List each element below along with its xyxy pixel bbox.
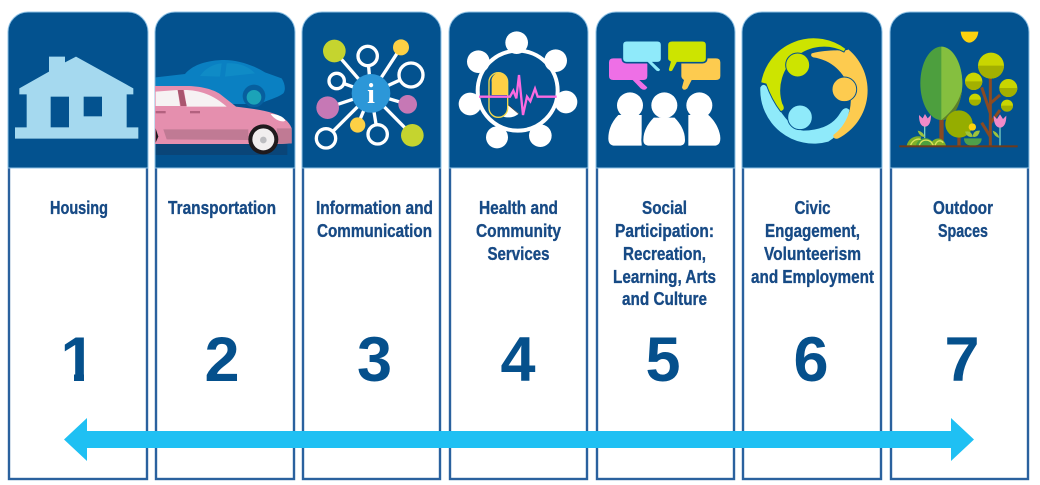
number 3: 3 — [357, 325, 392, 395]
number 4: 4 — [500, 325, 536, 395]
heading: outdoor spaces: Outdoor — [933, 197, 993, 218]
number 6: 6 — [793, 325, 829, 395]
heading: civic engagement: Volunteerism — [764, 243, 861, 264]
icon: trees and flowers — [899, 32, 1018, 147]
heading: civic engagement: Civic — [794, 197, 830, 218]
panel: housing — [8, 12, 148, 479]
heading: information and communication: Information and — [316, 197, 433, 218]
heading: health and community services: Health and — [479, 197, 558, 218]
icon: cars — [147, 60, 292, 155]
heading: social participation: Recreation, — [623, 243, 706, 264]
icon: health network — [459, 31, 577, 148]
panel: health and community services — [449, 12, 588, 479]
heading: information and communication: Communication — [317, 220, 432, 241]
icon: information network — [316, 39, 424, 148]
panel: information and communication — [302, 12, 441, 479]
icon glyph: info: i — [367, 79, 375, 110]
number 2: 2 — [204, 325, 240, 395]
icon: three linked figures — [760, 38, 868, 144]
heading: social participation: Participation: — [615, 220, 714, 241]
heading: civic engagement: Engagement, — [765, 220, 860, 241]
panel: social participation — [596, 12, 735, 479]
heading: social participation: Social — [642, 197, 687, 218]
number 7: 7 — [944, 325, 980, 395]
number 1: 1 — [60, 325, 96, 395]
heading: health and community services: Community — [476, 220, 562, 241]
icon: people talking — [608, 41, 720, 147]
heading: transportation: Transportation — [168, 197, 276, 218]
panel: transportation — [147, 12, 295, 479]
heading: social participation: and Culture — [622, 288, 707, 309]
heading: civic engagement — [751, 197, 874, 287]
heading: health and community services: Services — [488, 243, 550, 264]
heading: health and community services — [476, 197, 562, 264]
heading: civic engagement: and Employment — [751, 266, 874, 287]
heading: information and communication — [316, 197, 433, 241]
number 5: 5 — [645, 325, 681, 395]
icon: house — [15, 57, 138, 139]
heading: outdoor spaces — [933, 197, 993, 241]
panel: outdoor spaces — [890, 12, 1029, 479]
arrow: double-headed across all domains — [64, 418, 974, 461]
heading: social participation — [613, 197, 716, 309]
panel: civic engagement — [742, 12, 882, 479]
heading: outdoor spaces: Spaces — [938, 220, 988, 241]
heading: housing: Housing — [50, 197, 108, 218]
heading: social participation: Learning, Arts — [613, 266, 716, 287]
